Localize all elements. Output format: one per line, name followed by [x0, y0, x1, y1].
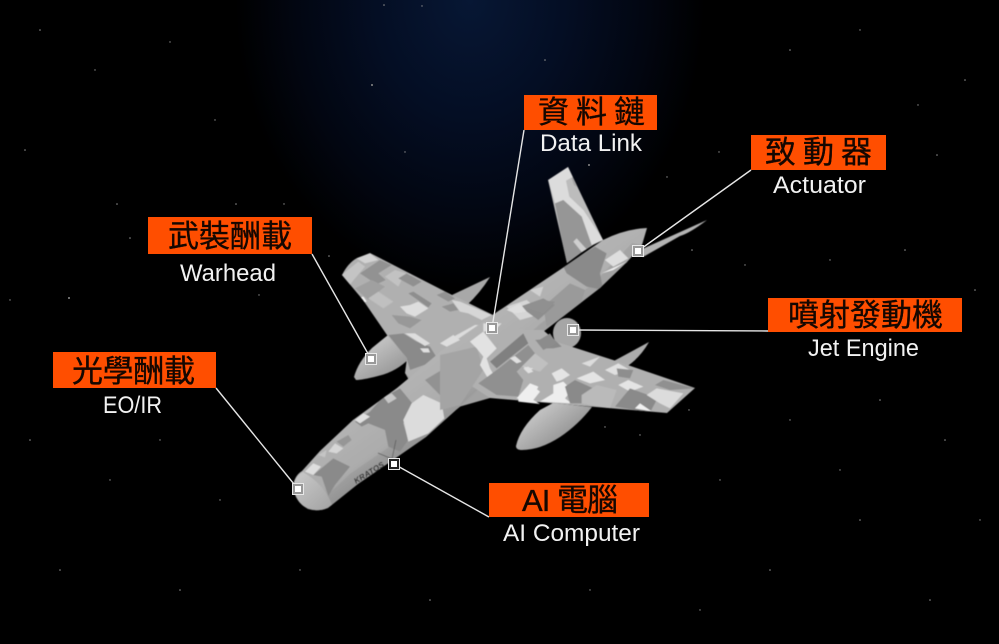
tail fin	[547, 166, 604, 264]
central underlay	[405, 310, 543, 408]
right stabilizer	[640, 220, 707, 257]
mid fuselage detail	[440, 300, 557, 410]
label: actuator: 致 動 器	[765, 135, 872, 170]
label: actuator: Actuator	[773, 172, 866, 199]
marker: jet engine	[568, 324, 578, 336]
marker: data link	[486, 322, 498, 334]
label: jet engine: Jet Engine	[808, 335, 919, 362]
label: data link: Data Link	[540, 130, 643, 157]
label: jet engine	[768, 298, 962, 362]
label: data link: 資 料 鏈	[538, 95, 645, 130]
leader lines	[216, 130, 768, 517]
label: warhead	[148, 217, 312, 287]
label: actuator	[751, 135, 886, 199]
marker: warhead	[366, 354, 376, 364]
label: EO/IR: 光學酬載	[72, 354, 195, 389]
left pod	[354, 335, 410, 380]
left stabilizer	[602, 262, 628, 276]
front fuselage camo	[305, 371, 445, 495]
left pod tail	[452, 277, 490, 305]
fuselage	[285, 220, 655, 515]
label: warhead: Warhead	[180, 260, 276, 287]
label: EO/IR: EO/IR	[103, 392, 162, 419]
right wing	[473, 330, 696, 414]
marker: actuator	[632, 246, 644, 256]
label: AI computer: AI 電腦	[522, 483, 618, 518]
antenna marks	[378, 440, 396, 459]
blue glow	[230, 0, 710, 290]
label: data link	[524, 95, 657, 157]
rear fuselage camo	[507, 247, 628, 327]
right pod tail	[612, 342, 649, 367]
right pod	[516, 403, 592, 450]
fuselage shading	[348, 244, 638, 478]
label: EO/IR	[53, 352, 216, 419]
label: warhead: 武裝酬載	[168, 219, 292, 254]
label: AI computer: AI Computer	[503, 520, 640, 547]
left wing	[341, 252, 493, 376]
marker: EO/IR	[292, 484, 304, 494]
marker: AI computer	[388, 458, 400, 470]
label: AI computer	[489, 483, 649, 547]
aircraft	[285, 160, 707, 515]
jet engine nacelle	[553, 318, 581, 348]
label: jet engine: 噴射發動機	[788, 298, 943, 333]
nose cap	[293, 472, 332, 512]
KRATOS marking: KRATOS	[352, 460, 386, 486]
